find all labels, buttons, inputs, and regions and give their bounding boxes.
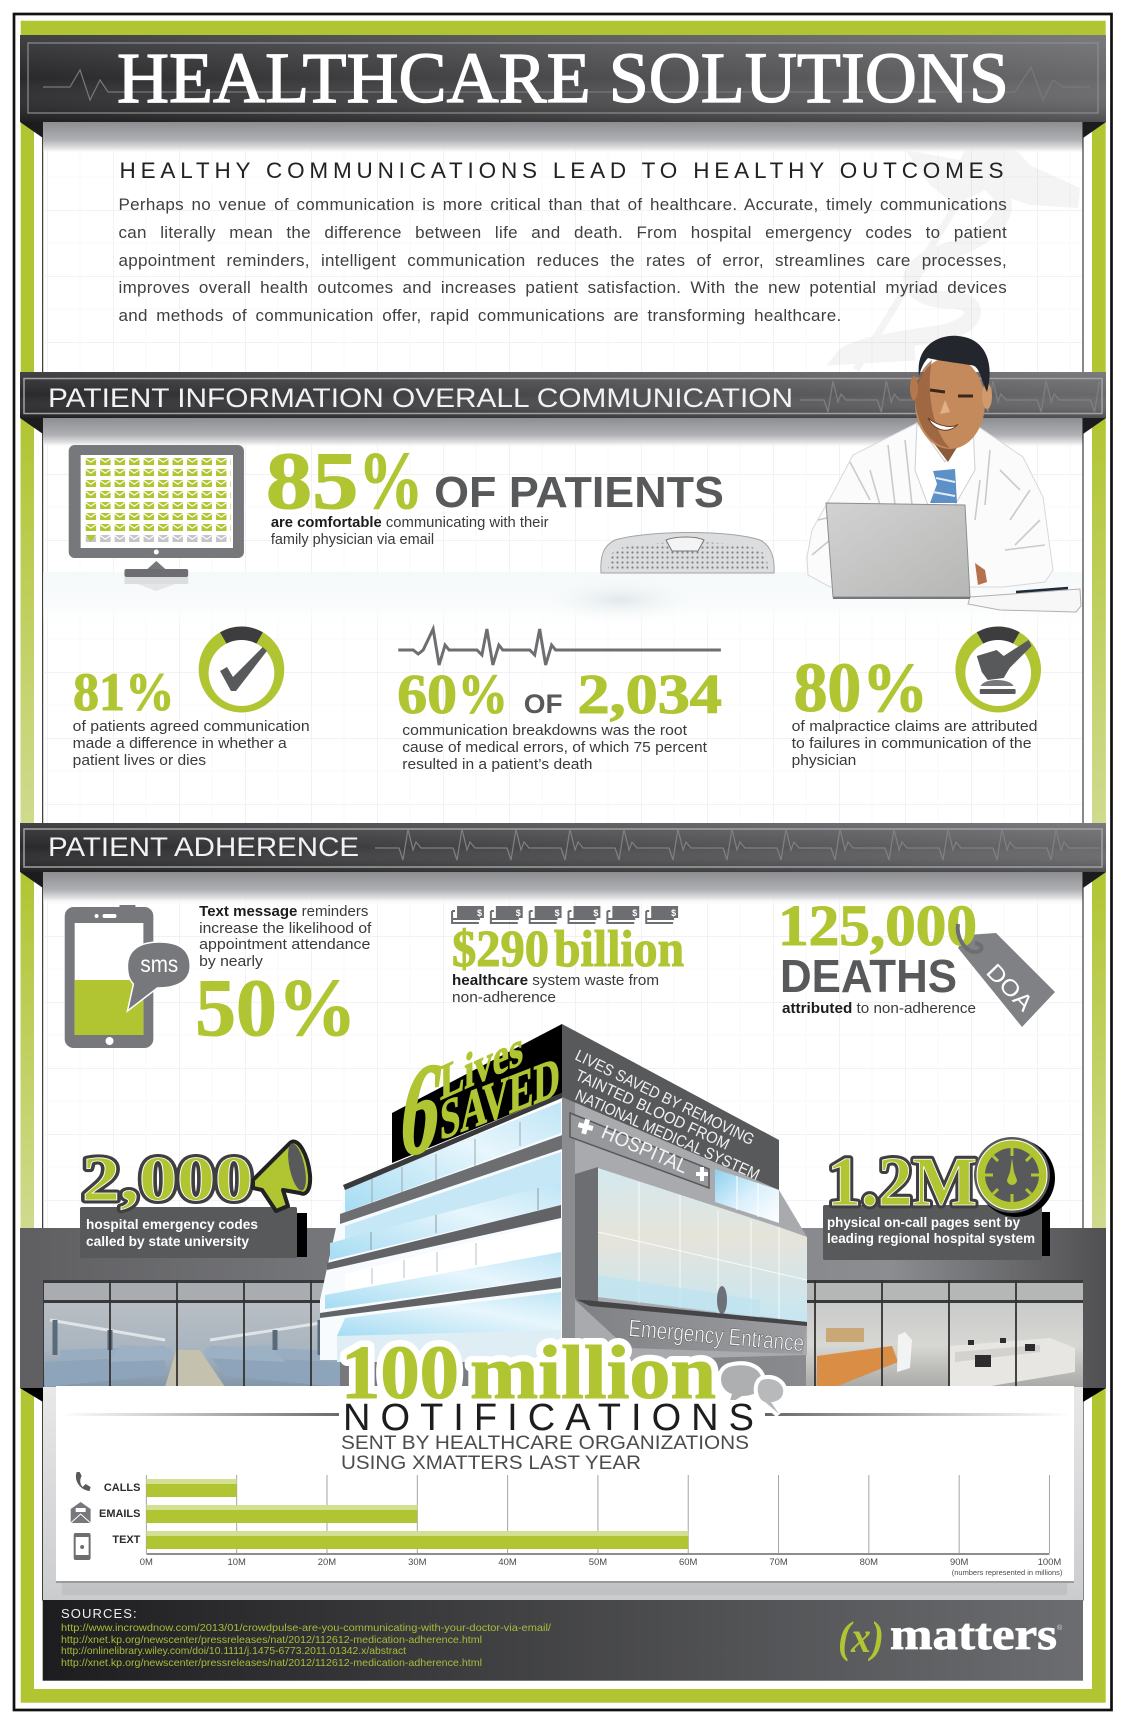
hospital band with photo windows (20, 1228, 1106, 1388)
sources links (61, 1622, 551, 1669)
callout number: 2,000 (82, 1143, 253, 1214)
illustration: hospital building (320, 1019, 807, 1362)
6 lives saved sign: 6 (392, 1034, 451, 1185)
bar: text (146, 1531, 688, 1549)
stat: 85% of patients: 85 (266, 435, 358, 526)
sources links: http://www.incrowdnow.com/2013/01/crowdpulse-are-you-communicating-with-your-doctor-via-email/ (61, 1622, 551, 1634)
icon: clock (974, 1137, 1055, 1217)
stat: 80% (792, 626, 1041, 769)
right station photo (806, 1280, 1083, 1387)
axis labels: 20M (318, 1557, 336, 1568)
icon: handset (76, 1472, 91, 1491)
sources links: http://onlinelibrary.wiley.com/doi/10.1111/j.1475-6773.2011.01342.x/abstract (61, 1645, 406, 1657)
stat: text reminders 50%: Text message reminders (199, 904, 368, 920)
callout: 2,000 emergency codes: called by state university (86, 1233, 249, 1249)
heading: 100 million notifications: million (470, 1331, 716, 1415)
icon: money stacks: $ (477, 908, 482, 918)
axis labels: 70M (769, 1557, 788, 1568)
category labels: EMAILS (99, 1508, 140, 1520)
bar chart (71, 1472, 1063, 1577)
stat: 60% of 2,034: OF (524, 689, 563, 719)
stat: 125,000 deaths (778, 893, 1055, 1027)
heading: 100 million notifications: 100 (341, 1331, 459, 1415)
axis labels: 50M (589, 1557, 607, 1568)
stat: 80%: to failures in communication of the (792, 736, 1032, 752)
stat: 81%: made a difference in whether a (73, 736, 288, 752)
icon: monitor with email grid (69, 445, 244, 591)
stat: $290 billion: healthcare system waste from (452, 973, 659, 989)
axis labels: 40M (498, 1557, 517, 1568)
stat description: communication breakdowns was the root (402, 723, 687, 739)
intro paragraph: appointment reminders, intelligent communication reduces the rates of error, streamlines care processes, (118, 250, 1007, 270)
stat: $290 billion: non-adherence (452, 990, 556, 1006)
icon: DOA tag: DOA (981, 958, 1039, 1017)
6 lives saved sign: SAVED (440, 1044, 560, 1153)
panel: sources footer (43, 1600, 1083, 1681)
main white panel with grid (43, 120, 1083, 1600)
axis labels: 10M (227, 1557, 246, 1568)
intro text block (118, 158, 1007, 331)
logo: xmatters: ® (1057, 1624, 1063, 1632)
icon: money stacks: $ (671, 908, 676, 918)
axis labels: 80M (860, 1557, 878, 1568)
6 lives saved sign (392, 1019, 562, 1185)
bar: calls (146, 1479, 237, 1497)
stat: text reminders 50%: appointment attendance (199, 937, 370, 953)
header band (20, 35, 1106, 154)
illustration: doctor with laptop (807, 336, 1081, 612)
axis labels: 90M (950, 1557, 968, 1568)
stat: text reminders 50%: 50 (195, 962, 277, 1053)
icon: money stacks: $ (516, 908, 521, 918)
6 lives saved sign: Lives (440, 1019, 523, 1111)
stat: 125,000 deaths: 125,000 (778, 893, 977, 958)
section band: patient information (20, 372, 1106, 448)
rooftop wall with text (562, 1024, 779, 1190)
category labels: CALLS (104, 1482, 140, 1494)
intro paragraph: and methods of communication offer, rapid communications are transforming healthcare. (118, 306, 842, 325)
stat: $290 billion: billion (554, 921, 684, 978)
emergency entrance canopy (575, 1299, 807, 1357)
axis labels: 60M (679, 1557, 698, 1568)
section heading: PATIENT ADHERENCE (48, 832, 359, 862)
title: HEALTHCARE SOLUTIONS (117, 38, 1009, 118)
sources links: http://xnet.kp.org/newscenter/pressreleases/nat/2012/112612-medication-adherence.html (61, 1657, 482, 1669)
stat: 85% of patients: family physician via email (271, 532, 434, 548)
logo: xmatters (838, 1610, 1063, 1662)
section band: patient adherence (20, 823, 1106, 904)
stat: 60% of 2,034: 60 (397, 664, 457, 726)
icon: money stacks (452, 906, 678, 923)
stat description: of malpractice claims are attributed (792, 719, 1038, 735)
icon: DOA tag (958, 933, 1055, 1027)
category labels (99, 1482, 141, 1546)
callout number: 1.2M (827, 1144, 977, 1221)
bar chart: (numbers represented in millions) (952, 1568, 1063, 1577)
sources links: http://xnet.kp.org/newscenter/pressreleases/nat/2012/112612-medication-adherence.html (61, 1634, 482, 1646)
stat: 81%: % (125, 662, 174, 722)
stat: 81%: patient lives or dies (73, 753, 206, 769)
hospital sign (570, 1113, 709, 1188)
icon: tag string (958, 924, 982, 952)
icon: smartphone (74, 1533, 91, 1560)
stat: 81%: 81 (73, 662, 125, 722)
intro heading: HEALTHY COMMUNICATIONS LEAD TO HEALTHY OUTCOMES (120, 158, 1004, 183)
stat description: are comfortable communicating with their (271, 515, 549, 531)
stat description: of patients agreed communication (73, 719, 310, 735)
stat: 60% of 2,034: cause of medical errors, of which 75 percent (402, 740, 707, 756)
axis labels: 30M (408, 1557, 427, 1568)
watermark: caduceus (845, 127, 1080, 370)
sources heading: SOURCES: (61, 1606, 138, 1621)
intro paragraph: Perhaps no venue of communication is more critical than that of healthcare. Accurate, timely communications (118, 195, 1007, 214)
heading: 100 million notifications: 100 (341, 1331, 459, 1415)
stat: text reminders 50%: increase the likelihood of (199, 921, 372, 937)
icon: phone with sms bubble: sms (140, 951, 178, 977)
stat: 81% (73, 626, 310, 769)
callout text: physical on-call pages sent by (827, 1214, 1020, 1230)
heading: 100 million notifications: USING XMATTERS LAST YEAR (341, 1453, 641, 1474)
right face (562, 1097, 807, 1362)
intro paragraph: improves overall health outcomes and increases patient satisfaction. With the new potential myriad devices (118, 278, 1007, 297)
callout: 1.2M on-call pages: 1.2M (827, 1144, 977, 1221)
panel: notifications chart (20, 1331, 1106, 1600)
stat: 125,000 deaths: attributed to non-adherence (782, 1001, 976, 1017)
table surface (43, 572, 1083, 634)
stat: 60% of 2,034: resulted in a patient’s death (402, 757, 592, 773)
category labels: TEXT (112, 1534, 141, 1546)
stat: 85% of patients: OF PATIENTS (434, 468, 724, 517)
heading: 100 million notifications: SENT BY HEALTHCARE ORGANIZATIONS (341, 1433, 749, 1454)
icon: money stacks: $ (593, 908, 598, 918)
heading: 100 million notifications: NOTIFICATIONS (343, 1397, 754, 1439)
stat: 85% of patients (266, 435, 724, 548)
icon: phone with sms bubble (65, 905, 190, 1048)
axis labels (140, 1557, 1061, 1568)
callout: 1.2M on-call pages: leading regional hospital system (827, 1230, 1035, 1246)
stat: text reminders 50%: by nearly (199, 954, 264, 970)
stat: 60% of 2,034: 2,034 (578, 664, 722, 726)
hospital sign: HOSPITAL (598, 1121, 691, 1178)
icon: megaphone (253, 1142, 310, 1211)
stat: 125,000 deaths: DEATHS (780, 950, 957, 1002)
stat: 80%: physician (792, 753, 856, 769)
stat: $290 billion: $290 (452, 921, 549, 978)
section heading: PATIENT INFORMATION OVERALL COMMUNICATION (48, 383, 793, 413)
axis labels: 100M (1038, 1557, 1061, 1568)
rooftop wall with text: NATIONAL MEDICAL SYSTEM (572, 1087, 762, 1184)
left face (320, 1102, 562, 1360)
stat: 60% of 2,034 (397, 629, 722, 773)
speech bubbles icon (721, 1365, 783, 1414)
stat: text reminders 50% (195, 904, 372, 1053)
icon: chair (601, 532, 774, 573)
left ward photo (43, 1280, 340, 1387)
icon: ring with checkmark (199, 626, 284, 712)
stat: text reminders 50%: % (278, 962, 356, 1053)
callout text: hospital emergency codes (86, 1216, 258, 1232)
icon: envelope (71, 1502, 91, 1523)
stat: 80%: % (862, 650, 928, 727)
icon: money stacks: $ (555, 908, 560, 918)
logo: xmatters: matters (890, 1610, 1057, 1659)
stat: 80%: 80 (794, 650, 861, 727)
callout: 2,000 emergency codes (80, 1142, 310, 1258)
logo: xmatters: (x) (838, 1613, 884, 1662)
callout: 2,000 emergency codes: 2,000 (82, 1143, 253, 1214)
stat: 85% of patients: % (358, 435, 423, 526)
heading: 100 million notifications: million (470, 1331, 716, 1415)
rooftop wall with text: LIVES SAVED BY REMOVING (572, 1047, 757, 1149)
emergency entrance canopy: Emergency Entrance (627, 1315, 805, 1357)
callout: 1.2M on-call pages (823, 1137, 1055, 1260)
bar: emails (146, 1505, 417, 1523)
icon: heartbeat line (398, 629, 721, 665)
axis labels: 0M (140, 1557, 153, 1568)
heading: 100 million notifications (339, 1331, 756, 1474)
intro paragraph: can literally mean the difference between life and death. From hospital emergency codes to patient (118, 223, 1007, 242)
rooftop wall with text: TAINTED BLOOD FROM (572, 1067, 732, 1154)
icon: ring with gavel (955, 626, 1041, 712)
stat: 60% of 2,034: % (458, 664, 508, 726)
intro paragraph (118, 191, 1007, 331)
stat: $290 billion (452, 921, 684, 1006)
icon: money stacks: $ (632, 908, 637, 918)
